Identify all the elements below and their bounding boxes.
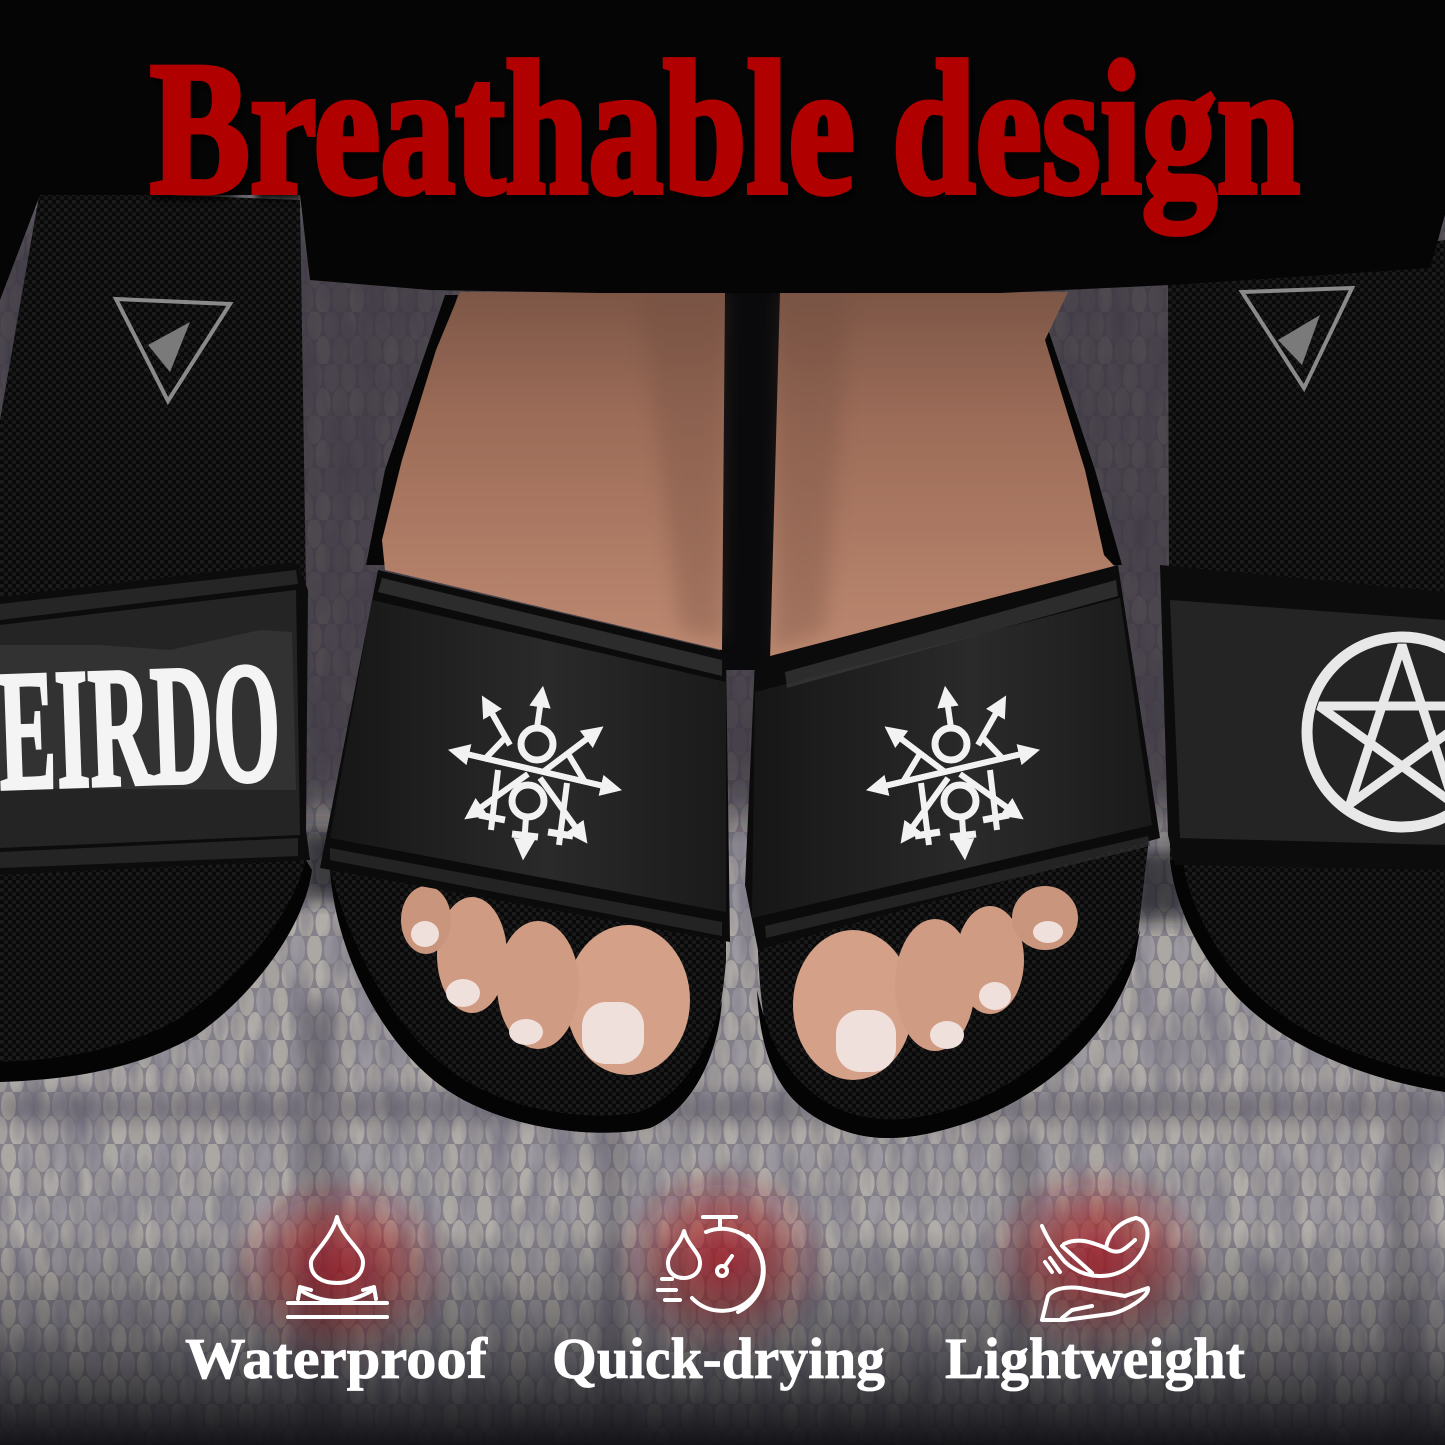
heel edge left	[366, 295, 458, 565]
grunge band	[0, 630, 296, 790]
label: lightweight: Lightweight	[945, 1326, 1246, 1391]
black garment at top	[0, 0, 1445, 300]
outer left slide	[0, 190, 312, 1082]
feature: lightweight	[945, 1218, 1246, 1391]
icon: water drop on surface	[288, 1217, 387, 1317]
dark gap between the feet	[720, 285, 784, 670]
feature: quick-drying	[552, 1217, 885, 1391]
logo triangle right	[1242, 288, 1352, 388]
pentagram emblem	[1307, 637, 1445, 827]
sigil emblem right	[880, 700, 1026, 846]
icon: stopwatch with drop	[658, 1217, 764, 1312]
toenails	[836, 921, 1063, 1072]
foot and toes	[382, 292, 725, 1075]
bottom dark fade	[0, 1230, 1445, 1445]
logo triangle left	[116, 299, 230, 401]
left foot slide	[320, 292, 730, 1133]
heel edge right	[1030, 320, 1122, 565]
feature: waterproof	[185, 1217, 488, 1391]
strap right	[1160, 565, 1445, 870]
WEIRDO lettering: EIRDO	[0, 627, 283, 827]
footbed	[330, 868, 726, 1133]
red glows behind icons	[230, 1167, 1208, 1367]
strap left	[0, 562, 310, 875]
right foot slide	[745, 292, 1160, 1138]
sigil emblem left	[462, 700, 608, 846]
foot and toes	[770, 292, 1118, 1080]
footbed	[757, 830, 1150, 1138]
outer right slide	[1160, 240, 1445, 1092]
strap	[745, 565, 1160, 950]
strap	[320, 570, 730, 942]
label: quick-drying: Quick-drying	[552, 1326, 885, 1391]
label: waterproof: Waterproof	[185, 1326, 488, 1391]
toenails	[411, 921, 644, 1064]
icon: feather over hand	[1042, 1218, 1148, 1320]
